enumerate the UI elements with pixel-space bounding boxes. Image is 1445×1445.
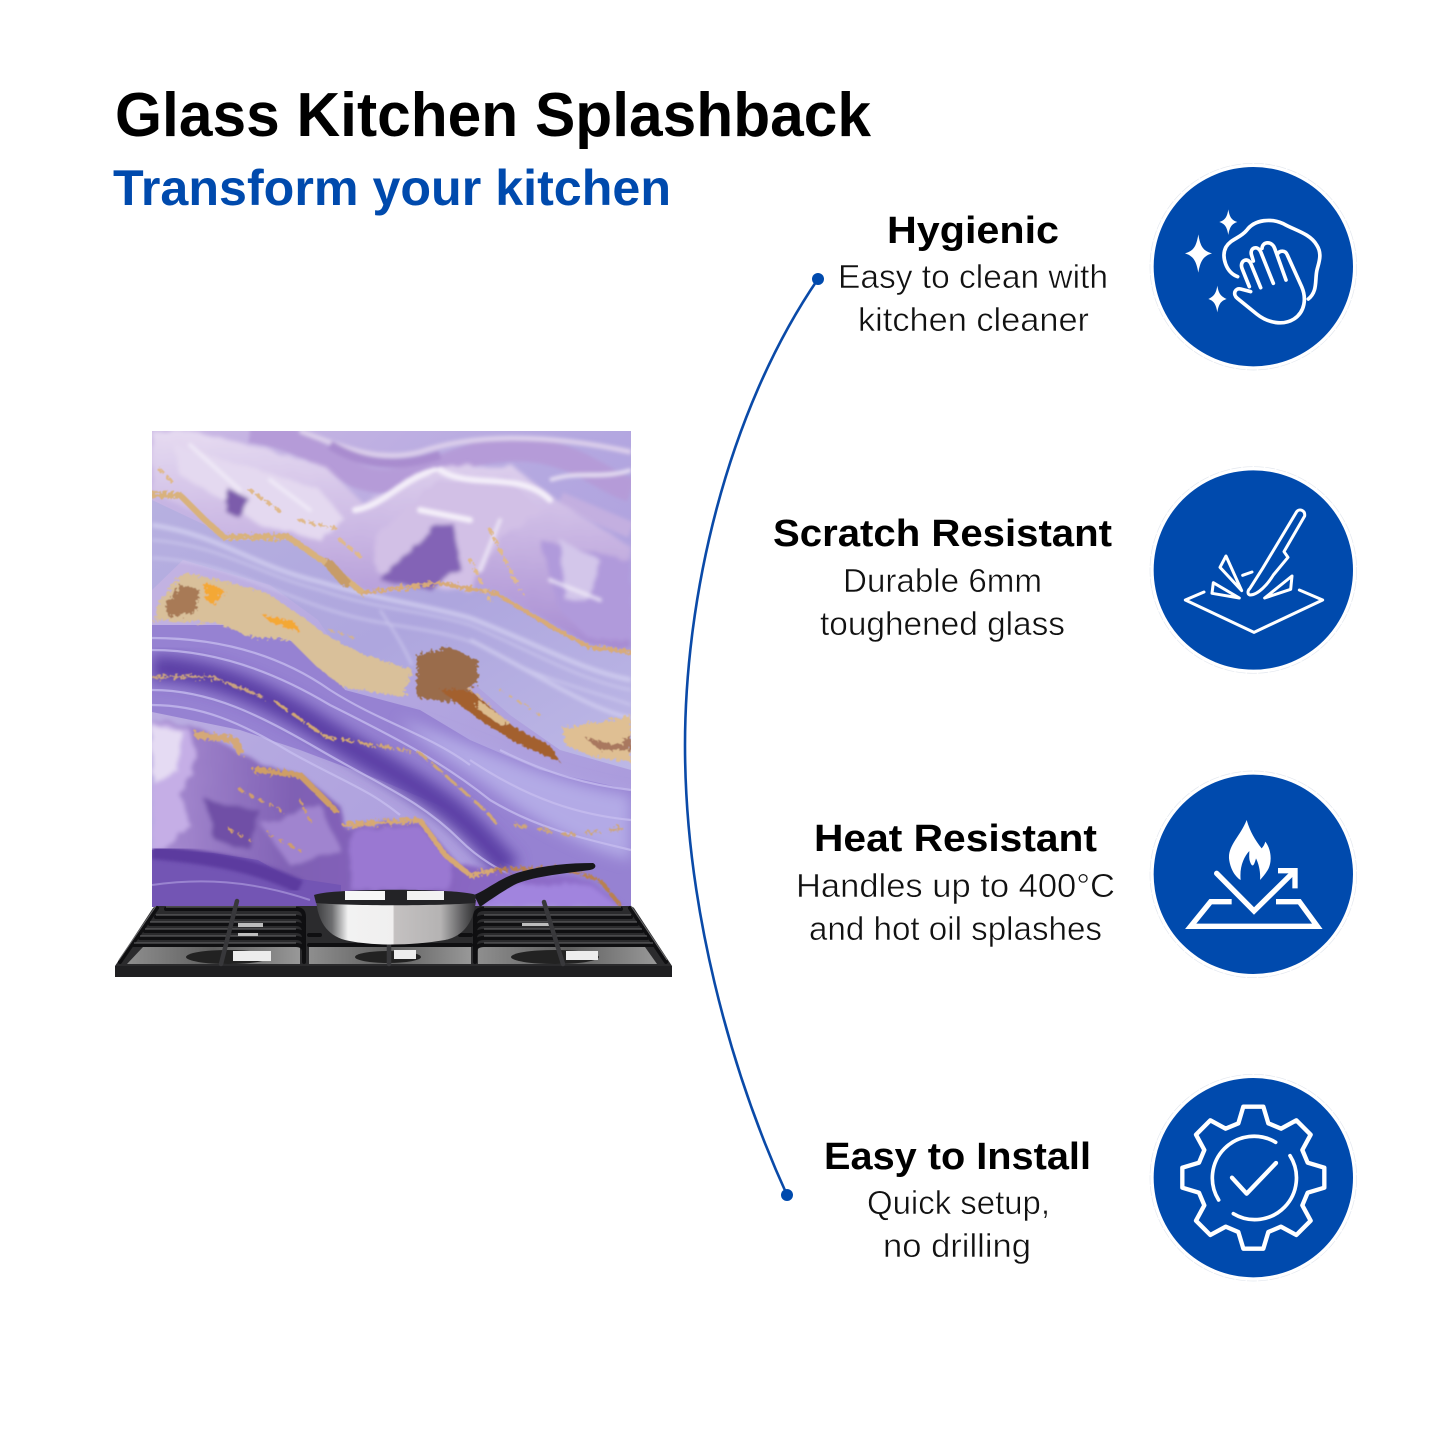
feature text: scratch resistant: toughened glass	[820, 605, 1065, 642]
feature text: heat resistant: Heat Resistant	[814, 818, 1097, 860]
upper crystal rock	[152, 431, 631, 648]
connector arc	[685, 273, 824, 1201]
feature text: hygienic	[838, 210, 1108, 338]
title: Glass Kitchen Splashback	[115, 81, 871, 150]
feature text: hygienic: Hygienic	[887, 210, 1059, 252]
burner plates	[127, 947, 300, 964]
icon: knife on glass	[1150, 467, 1357, 673]
grates	[120, 908, 666, 962]
crystal streaks	[190, 445, 600, 600]
lower crystal rock	[152, 720, 625, 907]
feature text: easy to install: Quick setup,	[867, 1184, 1050, 1221]
dark lower band	[152, 850, 341, 907]
feature text: heat resistant: Handles up to 400°C	[796, 867, 1115, 904]
feature text: easy to install	[824, 1136, 1091, 1264]
icon: flame and heat arrow	[1150, 771, 1357, 978]
icon: gear with check	[1150, 1074, 1357, 1281]
feature text: hygienic: kitchen cleaner	[858, 301, 1089, 338]
upper wavy bands	[250, 431, 631, 530]
grate bars	[221, 901, 563, 964]
feature text: scratch resistant	[773, 513, 1112, 642]
feature text: hygienic: Easy to clean with	[838, 258, 1108, 295]
deep purple band	[152, 625, 631, 907]
splashback with hob and pan	[115, 431, 672, 977]
gold veins	[153, 573, 631, 762]
feature text: scratch resistant: Scratch Resistant	[773, 513, 1112, 555]
light lavender band	[152, 500, 631, 770]
feature text: heat resistant: and hot oil splashes	[809, 910, 1102, 947]
feature text: heat resistant	[796, 818, 1115, 947]
frying pan	[314, 863, 595, 944]
burners	[186, 950, 599, 964]
feature text: easy to install: Easy to Install	[824, 1136, 1091, 1178]
marble glass panel	[152, 431, 631, 907]
feature text: scratch resistant: Durable 6mm	[843, 562, 1042, 599]
gas hob	[115, 901, 672, 977]
subtitle: Transform your kitchen	[113, 160, 671, 216]
feature text: easy to install: no drilling	[883, 1227, 1031, 1264]
icon: cleaning hand	[1150, 163, 1357, 370]
